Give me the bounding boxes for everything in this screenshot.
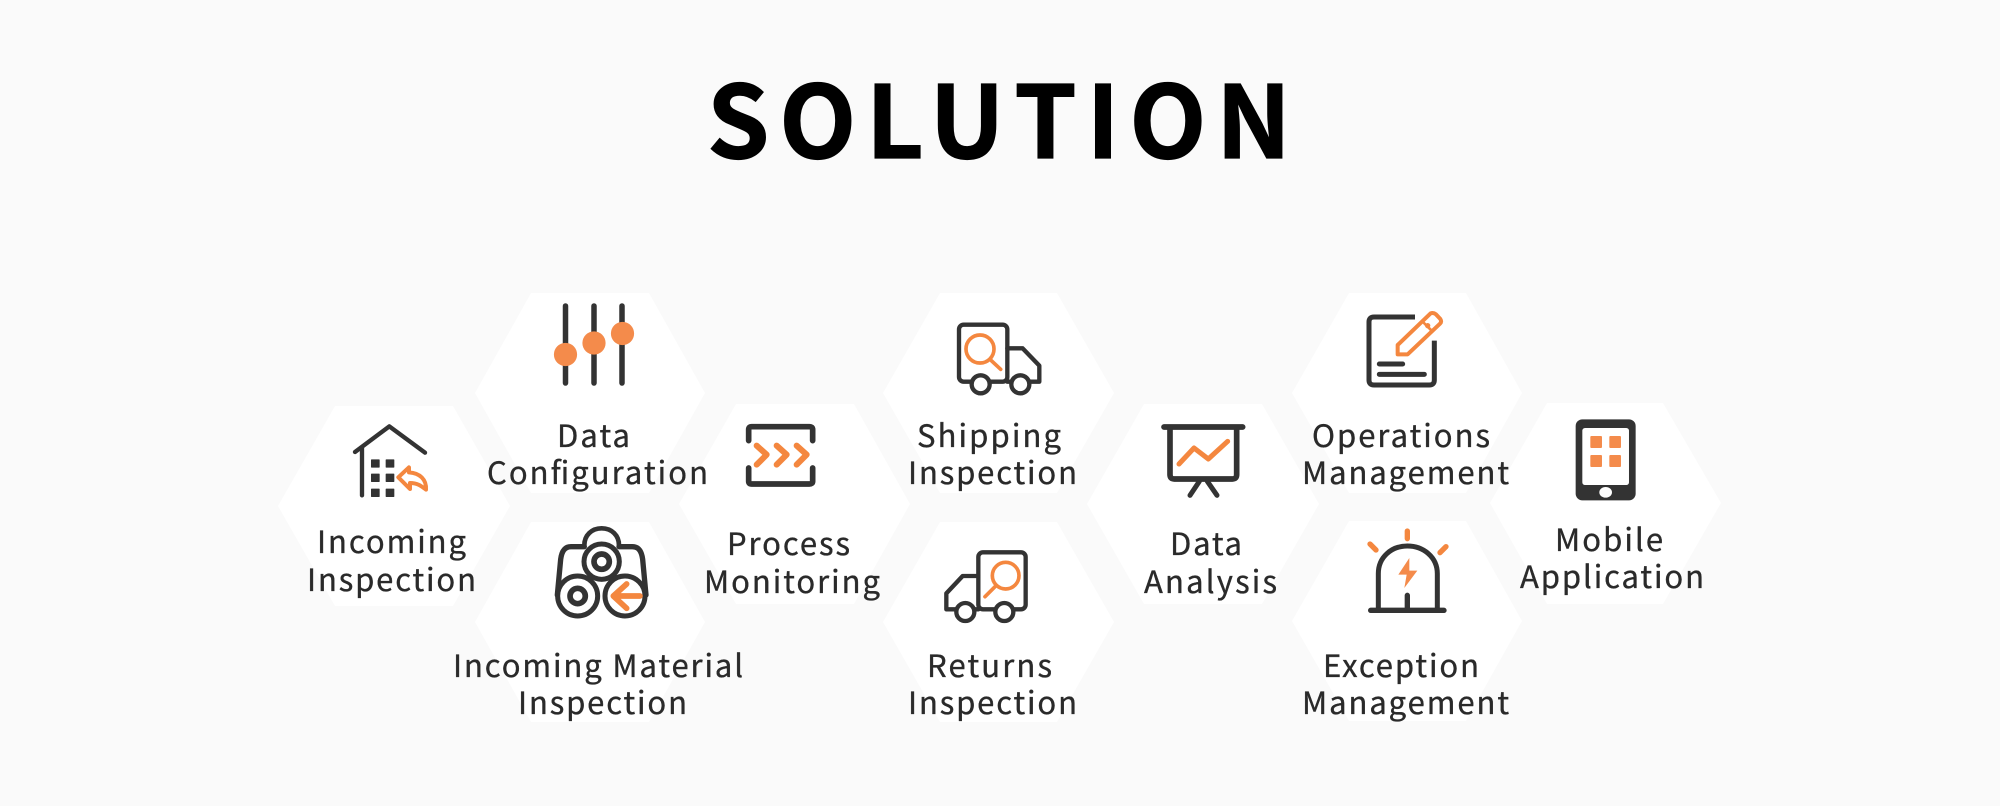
label: incoming material inspection: Inspection — [518, 678, 687, 723]
icon: process monitoring brackets and chevrons — [749, 427, 813, 484]
label: incoming inspection: Inspection — [307, 555, 476, 600]
label: process monitoring: Process — [727, 519, 850, 564]
label: mobile application: Application — [1520, 552, 1704, 597]
label: exception management — [1302, 641, 1509, 723]
label: data configuration: Configuration — [487, 448, 708, 493]
label: shipping inspection: Shipping — [917, 411, 1062, 456]
panel: operations management — [1292, 293, 1522, 493]
panel: shipping inspection — [883, 293, 1114, 493]
label: incoming material inspection — [453, 641, 743, 723]
label: incoming inspection — [307, 517, 476, 600]
panel: mobile application — [1490, 403, 1721, 604]
title: SOLUTION — [707, 42, 1291, 187]
label: data analysis: Analysis — [1144, 557, 1277, 602]
label: returns inspection — [908, 641, 1077, 723]
panel: returns inspection — [883, 522, 1114, 723]
label: process monitoring: Monitoring — [704, 557, 881, 602]
icon: document with pencil — [1369, 313, 1441, 385]
label: data configuration: Data — [557, 411, 630, 456]
label: data configuration — [487, 411, 708, 493]
panel: data analysis — [1087, 404, 1319, 604]
icon: reversed truck with magnifier — [946, 552, 1026, 621]
label: process monitoring — [704, 519, 881, 602]
icon: warehouse with return arrow — [355, 426, 426, 497]
panel: exception management — [1292, 521, 1522, 723]
label: mobile application: Mobile — [1555, 515, 1663, 560]
label: exception management: Management — [1302, 678, 1509, 723]
panel: incoming material inspection — [453, 522, 743, 723]
icon: presentation board with trend line — [1164, 427, 1243, 495]
icon: sliders — [554, 306, 634, 383]
panel: process monitoring — [679, 404, 910, 604]
label: returns inspection: Inspection — [908, 678, 1077, 723]
icon: tablet with app grid — [1576, 419, 1636, 500]
icon: truck with magnifier — [959, 325, 1039, 393]
label: shipping inspection: Inspection — [908, 448, 1077, 493]
icon: material rolls with arrow — [557, 528, 646, 616]
label: operations management: Operations — [1312, 411, 1490, 456]
label: data analysis: Data — [1170, 519, 1242, 564]
label: exception management: Exception — [1323, 641, 1479, 686]
label: shipping inspection — [908, 411, 1077, 493]
label: operations management: Management — [1302, 448, 1509, 493]
panel: incoming inspection — [278, 406, 510, 606]
label: operations management — [1302, 411, 1509, 493]
icon: alarm beacon — [1370, 531, 1446, 610]
label: incoming material inspection: Incoming Material — [453, 641, 743, 686]
label: mobile application — [1520, 515, 1704, 597]
label: incoming inspection: Incoming — [317, 517, 467, 562]
label: returns inspection: Returns — [927, 641, 1052, 686]
label: data analysis — [1144, 519, 1277, 602]
panel: data configuration — [475, 293, 708, 493]
